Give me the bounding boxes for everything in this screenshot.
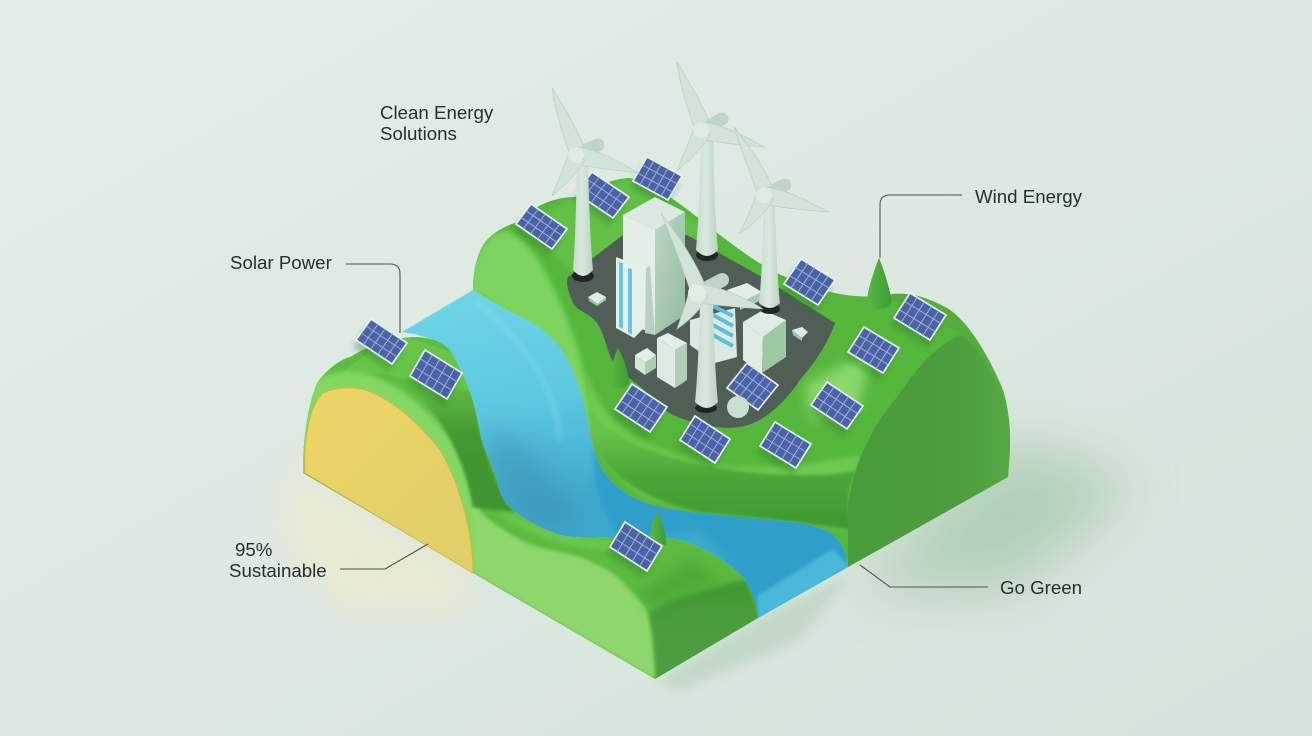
small cube <box>635 348 656 375</box>
panel shadows <box>353 164 943 578</box>
callout: 95% Sustainable: Sustainable <box>229 560 327 581</box>
solar panel: right 2 <box>848 327 899 373</box>
callout: 95% Sustainable <box>229 539 428 581</box>
solar panel: bottom <box>610 522 662 571</box>
land: right plateau <box>470 178 1012 567</box>
wind turbine 3 <box>734 127 829 314</box>
solar panel: left hill 2 <box>410 350 462 399</box>
solar panel: back 2 <box>576 172 629 218</box>
solar panel: far right <box>894 293 946 340</box>
solar panel: on plaza <box>727 363 778 410</box>
tall tower building <box>623 197 685 335</box>
tree: plaza <box>610 348 629 388</box>
small slab left <box>588 292 606 306</box>
striped wing building <box>690 283 762 363</box>
solar panel: left hill 1 <box>356 319 407 364</box>
small building <box>657 333 687 388</box>
soft shadow under front <box>655 575 850 690</box>
small slab right <box>792 327 808 341</box>
solar panel: front 1 <box>760 422 811 468</box>
callout: Wind Energy <box>880 186 1083 258</box>
wind turbine 2 <box>677 62 765 261</box>
callout: 95% Sustainable: 95% <box>235 539 272 560</box>
warm glow from yellow face <box>285 472 472 615</box>
clean energy isometric illustration <box>230 62 1312 736</box>
callout: Go Green <box>860 565 1082 598</box>
solar panel: front 3 <box>615 384 667 432</box>
river <box>402 290 850 622</box>
tree: top right <box>867 258 891 309</box>
callout: Solar Power: Solar Power <box>230 252 332 273</box>
tree: bottom <box>650 512 666 545</box>
land: front left block <box>300 335 760 684</box>
heading: Clean Energy Solutions: Clean Energy <box>380 102 493 123</box>
callout: Go Green: Go Green <box>1000 577 1082 598</box>
heading: Clean Energy Solutions: Solutions <box>380 123 457 144</box>
plaza <box>567 235 835 428</box>
yellow cross-section <box>305 388 473 573</box>
cube building right <box>743 310 786 373</box>
fin building with blue stripes <box>616 257 655 338</box>
solar panel: right ridge <box>784 259 835 305</box>
solar panel: right 3 <box>811 382 863 429</box>
callout: Wind Energy: Wind Energy <box>975 186 1083 207</box>
cast shadow right <box>850 440 1140 590</box>
sphere <box>727 396 749 418</box>
solar panel: front 2 <box>680 416 730 463</box>
solar panel: back left <box>516 204 567 249</box>
callout: Solar Power <box>230 252 400 333</box>
wind turbine 1 <box>552 88 638 282</box>
wind turbine 4 <box>661 213 763 413</box>
solar panel: back 3 <box>633 157 682 200</box>
